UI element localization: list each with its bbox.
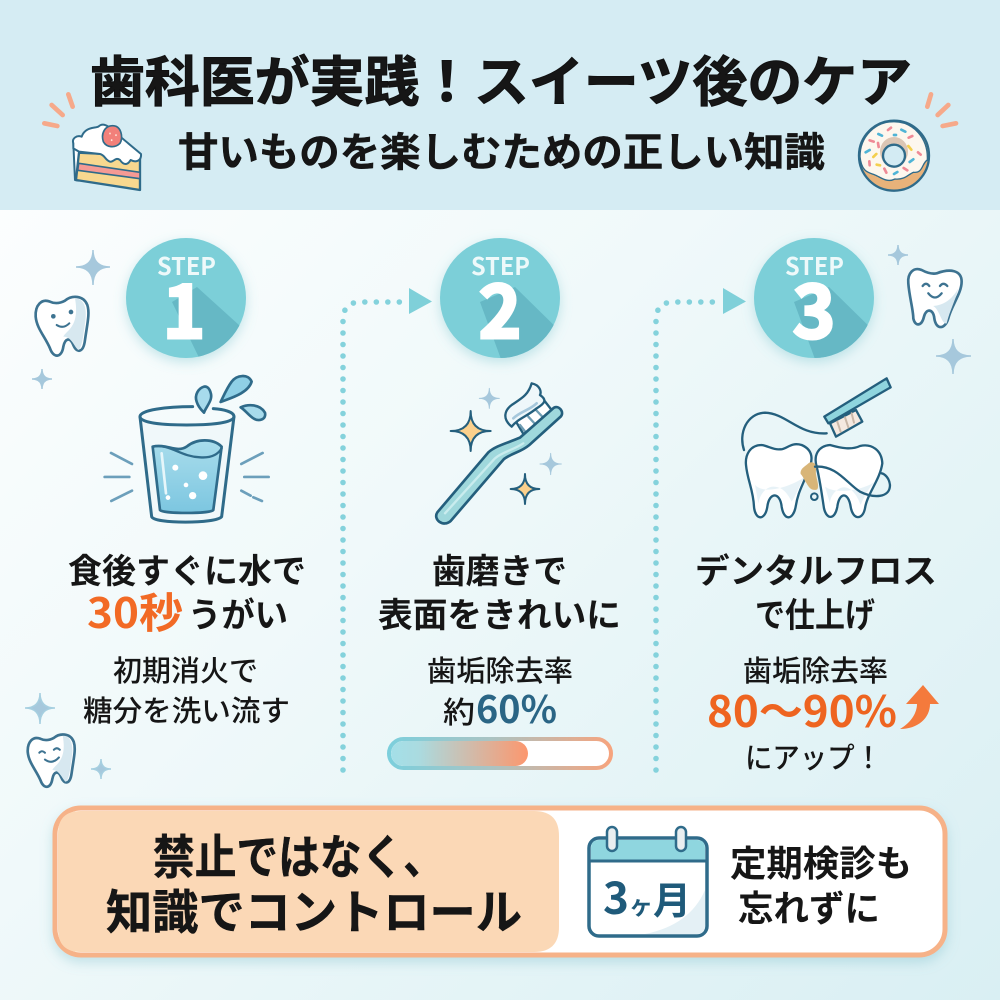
- step 2 heading: 表面をきれいに: [378, 588, 621, 637]
- checkup reminder text: 定期検診も: [730, 835, 912, 887]
- step 2 heading: [378, 544, 621, 637]
- step 1 heading: うがい: [188, 588, 288, 637]
- dotted arrow: step 2 to step 3: [656, 288, 746, 770]
- bottom banner: [55, 808, 945, 955]
- step 3 heading: [695, 544, 937, 637]
- step badge 1: STEP: [157, 247, 216, 282]
- sparkles around step 1: [25, 250, 111, 779]
- header band: [0, 0, 1000, 210]
- step 3 plaque removal rate: 80〜90%: [707, 678, 897, 740]
- bottom banner: 知識でコントロール: [106, 874, 522, 943]
- icon: calendar: [589, 827, 707, 936]
- step badge 2: 2: [479, 254, 521, 359]
- icon: smiling tooth bottom left: [28, 734, 75, 787]
- step 2 heading: 歯磨きで: [432, 544, 567, 593]
- icon: donut: [859, 94, 956, 191]
- step badge 3: STEP: [785, 247, 844, 282]
- subtitle: 甘いものを楽しむための正しい知識: [178, 120, 825, 178]
- step 3 plaque removal rate: [707, 648, 897, 777]
- step 1 heading: 30秒: [87, 580, 183, 641]
- step 3 plaque removal rate: にアップ！: [745, 735, 882, 777]
- banner left panel: [58, 811, 559, 952]
- dotted arrow: step 1 to step 2: [343, 288, 432, 770]
- title: 歯科医が実践！スイーツ後のケア: [90, 38, 912, 117]
- step 1 heading: 食後すぐに水で: [68, 544, 306, 593]
- step badge 2: [440, 238, 564, 370]
- icon: glass of water: [105, 376, 269, 522]
- banner message: 禁止ではなく、: [153, 819, 445, 888]
- checkup reminder text: [730, 835, 912, 932]
- step badge 3: 3: [793, 254, 835, 359]
- step 3 plaque removal rate: 歯垢除去率: [743, 648, 888, 690]
- step badge 3: [754, 238, 878, 370]
- step 1 description: 糖分を洗い流す: [83, 688, 290, 730]
- banner frame: [55, 808, 945, 955]
- step 2 plaque removal rate: [427, 648, 573, 734]
- progress bar 60%: [389, 739, 611, 768]
- step 3 heading: で仕上げ: [755, 588, 875, 637]
- step 2 plaque removal rate: 60%: [476, 679, 557, 734]
- step 1 description: [83, 648, 290, 730]
- step 2 plaque removal rate: 約: [443, 688, 475, 732]
- step 1 heading: [68, 544, 306, 641]
- step 3 heading: デンタルフロス: [695, 544, 937, 593]
- step badge 1: [126, 238, 250, 370]
- step 1 description: 初期消火で: [113, 648, 258, 690]
- icon: up arrow: [900, 685, 939, 729]
- icon: cake slice: [44, 94, 141, 190]
- icon: smiling tooth top right: [908, 269, 962, 327]
- checkup reminder text: 忘れずに: [738, 880, 880, 932]
- step badge 1: 1: [163, 254, 205, 359]
- step 2 plaque removal rate: 歯垢除去率: [427, 648, 573, 690]
- icon: teeth with floss and brush: [742, 378, 891, 517]
- step badge 2: STEP: [471, 247, 530, 282]
- icon: smiling tooth top left: [36, 297, 88, 356]
- icon: toothbrush with sparkles: [436, 383, 562, 523]
- sparkles around step 3: [888, 245, 971, 374]
- icon: calendar: 3ヶ月: [603, 863, 691, 927]
